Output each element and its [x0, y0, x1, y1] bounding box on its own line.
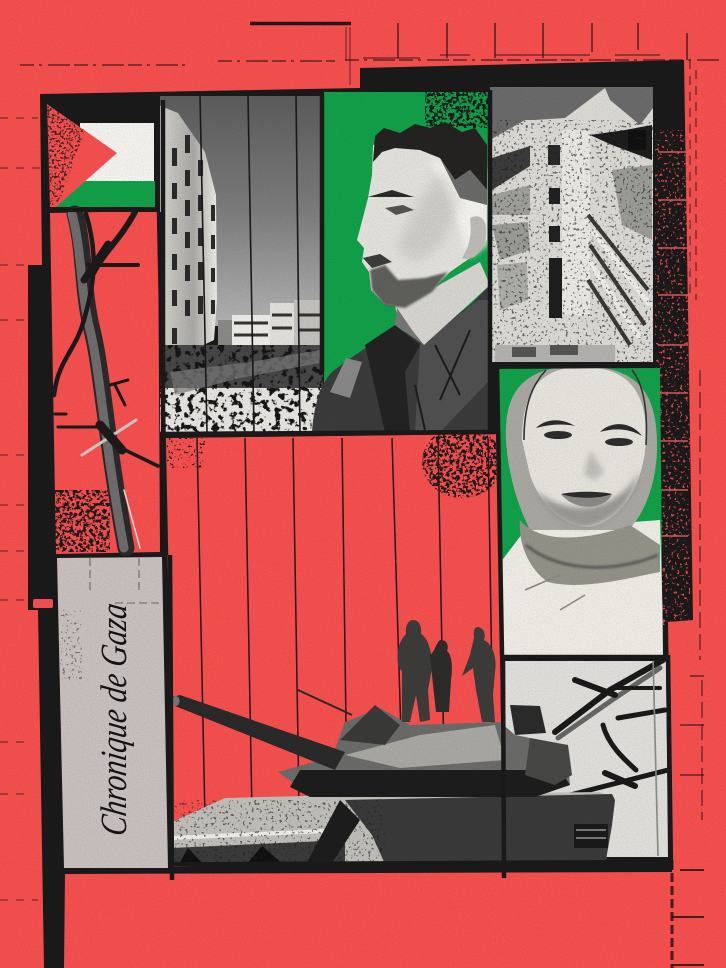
face shading	[430, 160, 487, 258]
brows and eyes	[536, 420, 575, 428]
red speckle on right frame	[655, 130, 690, 625]
soldier middle	[430, 640, 452, 712]
panel: palestinian flag	[47, 104, 155, 207]
upper tank	[172, 690, 572, 797]
hanging seams	[196, 438, 494, 808]
hijab inner edge	[524, 370, 646, 445]
panel: damaged tower photo	[158, 96, 325, 435]
barbed wire knot	[555, 660, 668, 795]
panel: barbed wire on red	[50, 211, 160, 554]
distant white buildings	[218, 300, 320, 345]
soldier left	[397, 620, 432, 722]
hair	[373, 122, 487, 190]
panel: portrait of woman on green	[497, 366, 664, 658]
eyebrow and eye	[368, 190, 414, 197]
title text: Chronique de Gaza	[94, 601, 135, 838]
tank gun barrel	[172, 695, 345, 770]
face	[357, 132, 487, 307]
mouth	[561, 494, 612, 507]
panel: red field with seams	[165, 426, 503, 867]
flag triangle	[47, 104, 117, 207]
panel: grey barbed wire photo	[505, 661, 668, 857]
tanks and soldiers	[170, 620, 615, 866]
lower tank hull	[170, 792, 615, 866]
panel: title label	[57, 557, 168, 868]
tower block	[158, 105, 217, 362]
jacket	[312, 285, 490, 432]
barbed wire strands	[54, 212, 158, 548]
scarf	[520, 520, 660, 585]
panel dividers	[65, 90, 671, 880]
frame notch	[33, 599, 53, 608]
photo seams	[200, 96, 300, 433]
cheek shadow	[535, 470, 640, 528]
hijab	[506, 366, 657, 530]
ear	[462, 216, 486, 259]
nose	[584, 450, 604, 480]
soldier right	[462, 627, 496, 722]
ink splatter	[422, 434, 497, 498]
mouth	[363, 254, 392, 268]
rubble ground	[160, 345, 325, 390]
clothing	[500, 520, 664, 658]
face	[522, 367, 646, 527]
soldiers	[397, 620, 496, 722]
panel: ruined facade photo	[490, 87, 653, 362]
neck	[395, 262, 490, 345]
dark ruin patches	[492, 125, 652, 318]
diagonal broken floors	[588, 215, 648, 345]
tower windows	[172, 135, 215, 344]
panel: portrait of man on green	[312, 92, 490, 432]
speckled ink	[55, 490, 110, 552]
